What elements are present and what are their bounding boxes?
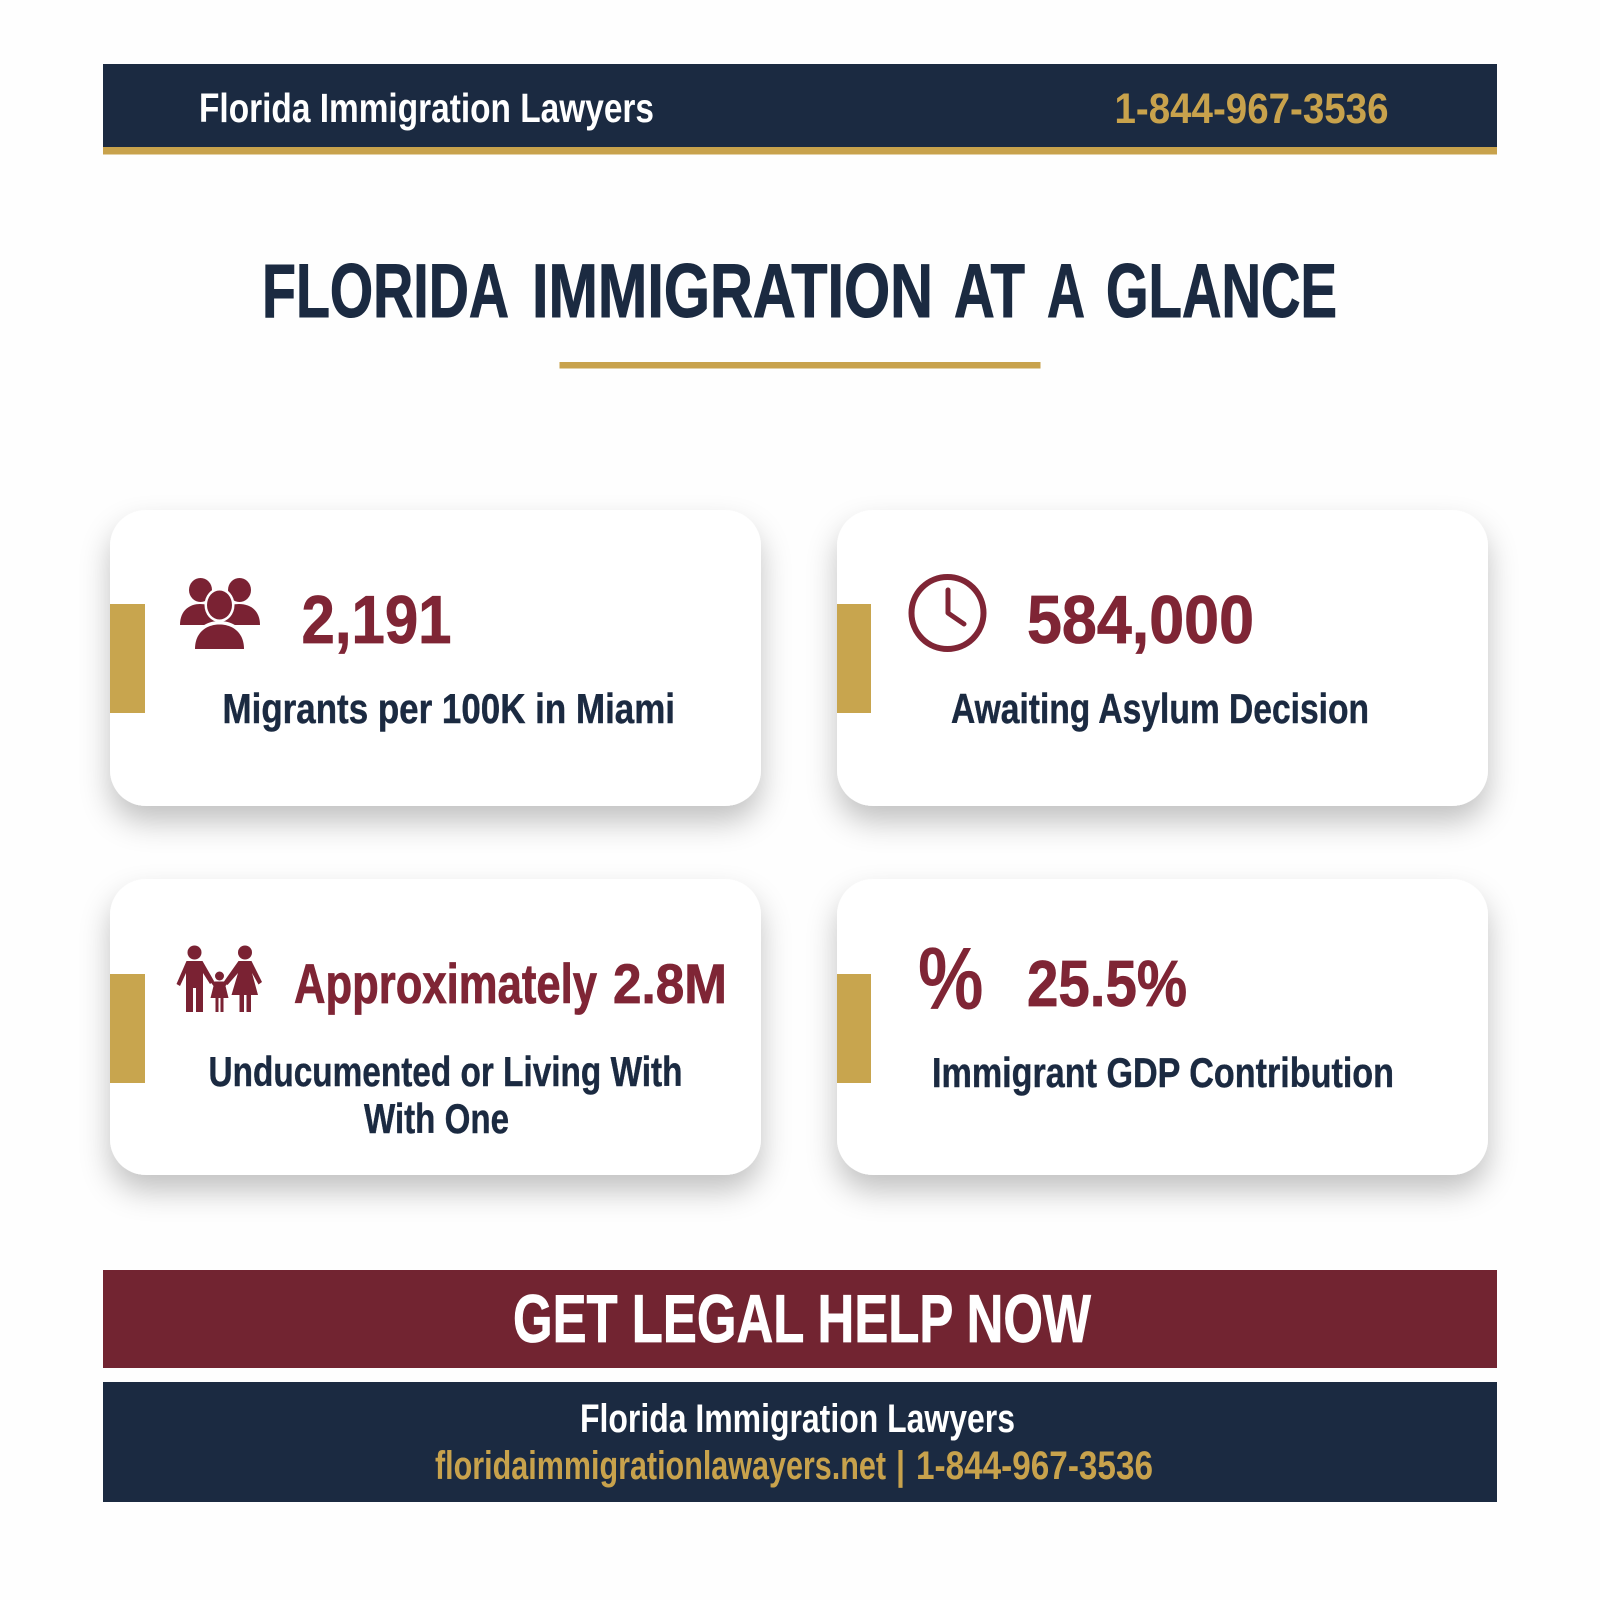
header phone number: 1-844-967-3536	[1114, 85, 1388, 133]
panel: undocumented population	[110, 879, 761, 1175]
call to action banner	[103, 1270, 1497, 1368]
title: IMMIGRATION	[532, 249, 933, 334]
footer website and phone: floridaimmigrationlawayers.net	[435, 1444, 886, 1488]
icon: group of people	[180, 578, 260, 652]
footer website and phone: |	[896, 1444, 905, 1488]
stat label: Immigrant GDP Contribution	[932, 1049, 1394, 1096]
panel: awaiting asylum decision	[837, 510, 1488, 806]
gold tab	[110, 974, 145, 1083]
gold tab	[837, 974, 871, 1083]
stat label: Awaiting Asylum Decision	[951, 685, 1369, 732]
header firm name: Florida Immigration Lawyers	[199, 85, 654, 131]
stat label line one: Unducumented or Living With	[208, 1048, 682, 1095]
stat label: Migrants per 100K in Miami	[222, 685, 675, 732]
stat value: 25.5%: 25.5%	[1027, 947, 1187, 1020]
stat value: approximately 2.8M: Approximately	[294, 952, 597, 1015]
gold tab	[837, 604, 871, 713]
stat label line two: With One	[364, 1095, 509, 1142]
title: FLORIDA	[262, 249, 509, 334]
title: A	[1047, 249, 1085, 334]
header bar	[103, 64, 1497, 154]
title	[262, 249, 1337, 334]
stat value: 2,191: 2,191	[302, 582, 452, 658]
stat value: 584,000: 584,000	[1027, 582, 1254, 658]
footer firm name: Florida Immigration Lawyers	[580, 1397, 1015, 1441]
footer website and phone: 1-844-967-3536	[916, 1444, 1153, 1488]
icon: clock	[912, 577, 984, 649]
icon: family	[176, 946, 262, 1012]
title underline	[560, 362, 1040, 368]
icon: percent sign: %	[918, 929, 984, 1028]
call to action text: GET LEGAL HELP NOW	[513, 1281, 1092, 1357]
panel: immigrant GDP contribution	[837, 879, 1488, 1175]
title: AT	[954, 249, 1025, 334]
gold tab	[110, 604, 145, 713]
title: GLANCE	[1106, 249, 1337, 334]
panel: migrants per 100K	[110, 510, 761, 806]
footer bar	[103, 1382, 1497, 1502]
stat value: approximately 2.8M: 2.8M	[613, 952, 727, 1015]
